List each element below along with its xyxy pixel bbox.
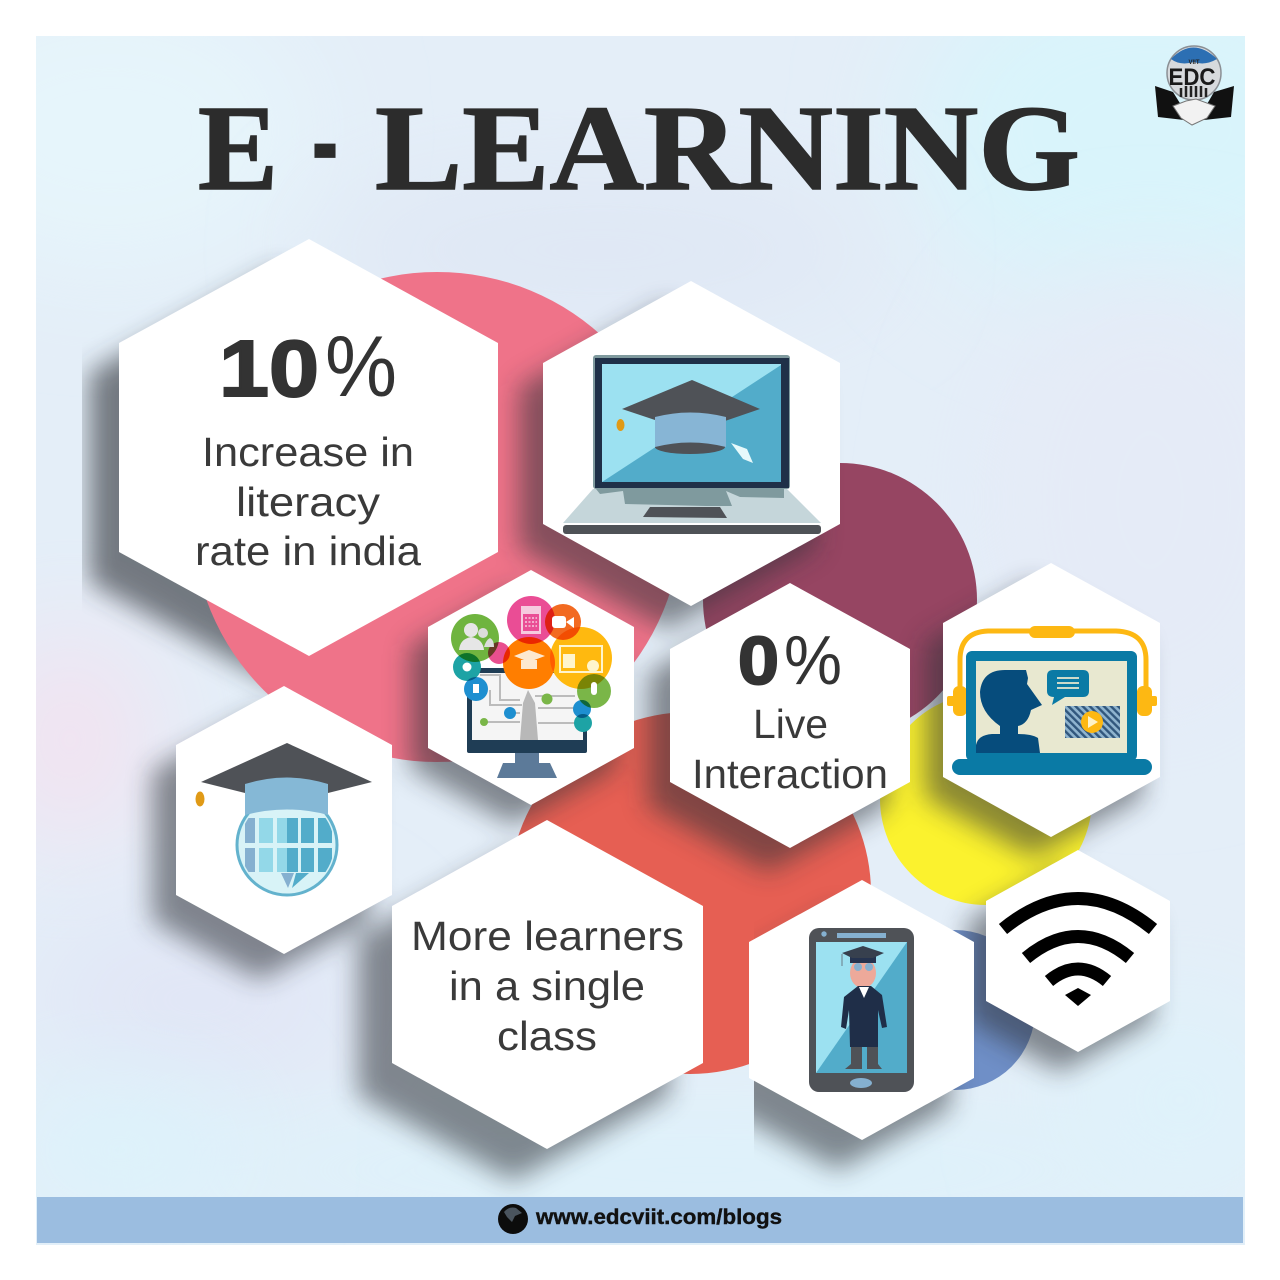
panel: laptop with graduation cap <box>543 281 840 606</box>
logo: EDC handshake globe: VIIT <box>1188 60 1200 66</box>
text: live interaction <box>692 701 888 797</box>
icon: wifi signal <box>1003 898 1153 1006</box>
logo: EDC handshake globe: EDC <box>1168 64 1216 91</box>
panel: 0% live interaction <box>670 583 910 848</box>
stat: 10%: % <box>325 319 397 415</box>
text: increase in literacy rate in india: literacy <box>236 479 381 525</box>
decorative circle: yellow <box>880 693 1092 905</box>
logo: EDC handshake globe <box>1155 46 1234 125</box>
title: LEARNING <box>375 81 1080 216</box>
stat: 0%: 0 <box>738 623 779 699</box>
icon: graduate figure <box>841 946 887 1069</box>
hexagon shadow: phone panel <box>725 910 950 1170</box>
text: live interaction: Interaction <box>692 751 888 797</box>
text: increase in literacy rate in india: Increase in <box>202 429 414 475</box>
stat: 10%: 10 <box>219 324 319 413</box>
stat: 0%: % <box>784 621 842 699</box>
footer url: www.edcviit.com/blogs <box>535 1206 782 1229</box>
title: - <box>312 53 338 219</box>
panel: video lesson with headset <box>943 563 1160 837</box>
icon: footer globe <box>498 1204 528 1234</box>
panel: graduation cap on globe <box>176 686 392 954</box>
decorative circle: blue <box>875 930 1035 1090</box>
panel: more learners <box>392 820 703 1149</box>
title: E <box>198 81 278 216</box>
panel: app tree on monitor <box>428 570 634 805</box>
decorative circle: pink <box>192 272 682 762</box>
text: more learners in a single class: in a single <box>449 963 645 1009</box>
footer bar <box>37 1197 1243 1243</box>
hexagon shadow: literacy panel <box>82 254 280 698</box>
panel: phone with graduate <box>749 880 974 1140</box>
decorative circle: red <box>509 712 871 1074</box>
panel: 10% literacy <box>119 239 498 656</box>
panel: wifi <box>986 850 1170 1052</box>
text: increase in literacy rate in india <box>195 429 421 574</box>
text: more learners in a single class: class <box>497 1013 597 1059</box>
text: more learners in a single class: More learners <box>411 913 684 959</box>
text: live interaction: Live <box>753 701 828 747</box>
text: increase in literacy rate in india: rate in india <box>195 528 421 574</box>
title <box>198 53 1080 219</box>
hexagon drop shadows <box>152 305 1152 1181</box>
text: more learners in a single class <box>411 913 684 1059</box>
stat: 10% <box>219 319 397 415</box>
decorative circle: plum <box>703 463 977 737</box>
stat: 0% <box>738 621 842 699</box>
